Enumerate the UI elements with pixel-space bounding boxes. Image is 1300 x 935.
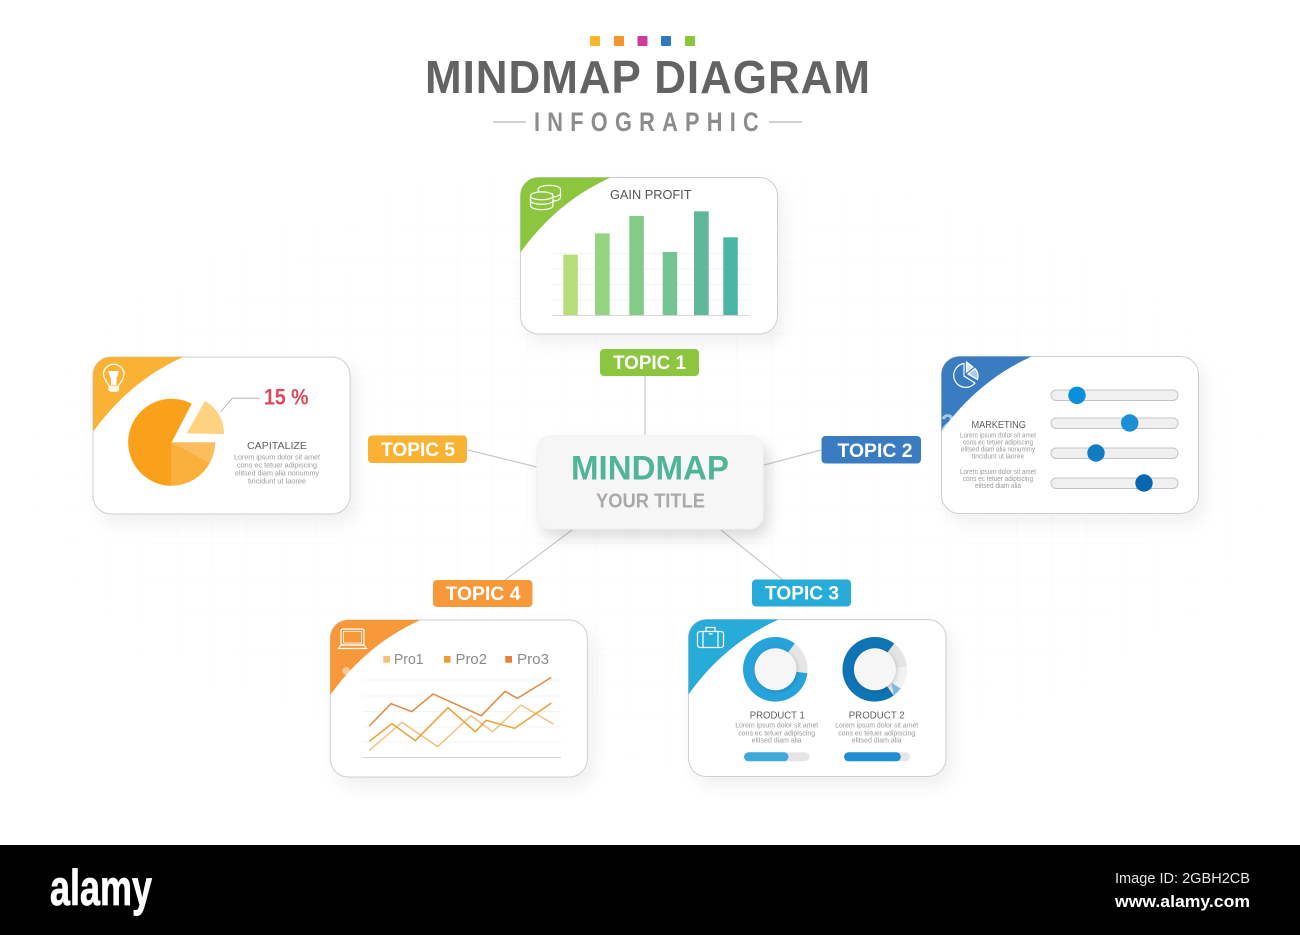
label: topic 5: TOPIC 5 (381, 439, 455, 461)
donut chart: product 2 (842, 637, 907, 702)
panel: products (688, 620, 946, 776)
text: marketing: Lorem ipsum dolor sit amet (960, 433, 1036, 440)
text: marketing: cons ec tetuer adipiscing (963, 476, 1033, 483)
text: product 2: cons ec tetuer adipiscing (838, 730, 915, 737)
icon: coins (530, 185, 560, 210)
text: product 1: cons ec tetuer adipiscing (738, 730, 815, 737)
slider controls (1051, 387, 1178, 492)
central node: YOUR TITLE (596, 490, 705, 512)
footer bar: www.alamy.com (1114, 892, 1250, 911)
text: capitalize: Lorem ipsum dolor sit amet (234, 455, 320, 462)
label: topic 2: TOPIC 2 (838, 440, 913, 462)
footer bar (0, 845, 1300, 935)
text: capitalize: elitsed diam alia nonummy (235, 470, 320, 477)
text: marketing: elitsed diam alia nonummy (961, 447, 1035, 454)
text: product 1 (735, 709, 818, 745)
colour dots (590, 36, 695, 46)
panel: gain profit (520, 178, 778, 334)
text: product 2: PRODUCT 2 (849, 709, 905, 721)
progress bar: product 1 (744, 752, 810, 761)
icon: light bulb (104, 364, 124, 392)
text: product 1: elitsed diam alia (752, 738, 802, 745)
label: topic 3 (752, 580, 851, 606)
footer bar: Image ID: 2GBH2CB (1115, 870, 1250, 887)
legend: Pro3 (517, 652, 549, 668)
icon: briefcase (698, 628, 724, 648)
text: marketing: tincidunt ut laoree (972, 454, 1024, 461)
label: topic 1 (600, 349, 699, 376)
label: topic 1: TOPIC 1 (613, 352, 686, 374)
text: product 1: Lorem ipsum dolor sit amet (735, 723, 818, 730)
central node: MINDMAP (571, 450, 729, 488)
text: marketing: cons ec tetuer adipiscing (963, 440, 1033, 447)
text: product 1: PRODUCT 1 (750, 709, 805, 721)
text: capitalize: CAPITALIZE (247, 440, 307, 452)
text: marketing: Lorem ipsum dolor sit amet (960, 469, 1036, 476)
footer bar: alamy (50, 860, 152, 916)
pie chart (128, 399, 224, 486)
legend (383, 652, 549, 668)
faint numeral: 2 (941, 410, 954, 437)
callout: 15 percent (221, 384, 308, 412)
label: topic 4: TOPIC 4 (446, 583, 521, 605)
text: capitalize: cons ec tetuer adipiscing (237, 462, 317, 470)
text: capitalize: tincidunt ut laoree (248, 478, 306, 485)
label: topic 5 (368, 436, 467, 463)
text: product 2: elitsed diam alia (852, 738, 902, 745)
heading: gain profit: GAIN PROFIT (610, 187, 692, 202)
central node (537, 436, 763, 529)
callout: 15 percent: 15 % (264, 384, 308, 410)
text: capitalize (234, 440, 320, 485)
panel: marketing (942, 356, 1198, 514)
legend: Pro1 (394, 652, 424, 668)
subtitle: INFOGRAPHIC (534, 107, 766, 137)
panel: capitalize (93, 357, 350, 514)
icon: pie (954, 362, 978, 387)
text: marketing: MARKETING (971, 419, 1026, 431)
line chart (363, 677, 561, 758)
icon: laptop (338, 629, 366, 648)
text: marketing: elitsed diam alia (975, 483, 1021, 490)
label: topic 2 (822, 436, 921, 464)
label: topic 3: TOPIC 3 (765, 582, 839, 604)
donut chart: product 1 (743, 637, 808, 702)
text: product 2: Lorem ipsum dolor sit amet (835, 723, 918, 730)
title: MINDMAP DIAGRAM (425, 51, 871, 103)
connector lines (468, 376, 821, 580)
text: product 2 (835, 709, 918, 745)
label: topic 4 (433, 580, 532, 607)
text: marketing (960, 419, 1036, 490)
progress bar: product 2 (844, 752, 910, 761)
bar chart (552, 211, 750, 316)
legend: Pro2 (456, 652, 487, 668)
panel: line chart card (330, 620, 587, 777)
